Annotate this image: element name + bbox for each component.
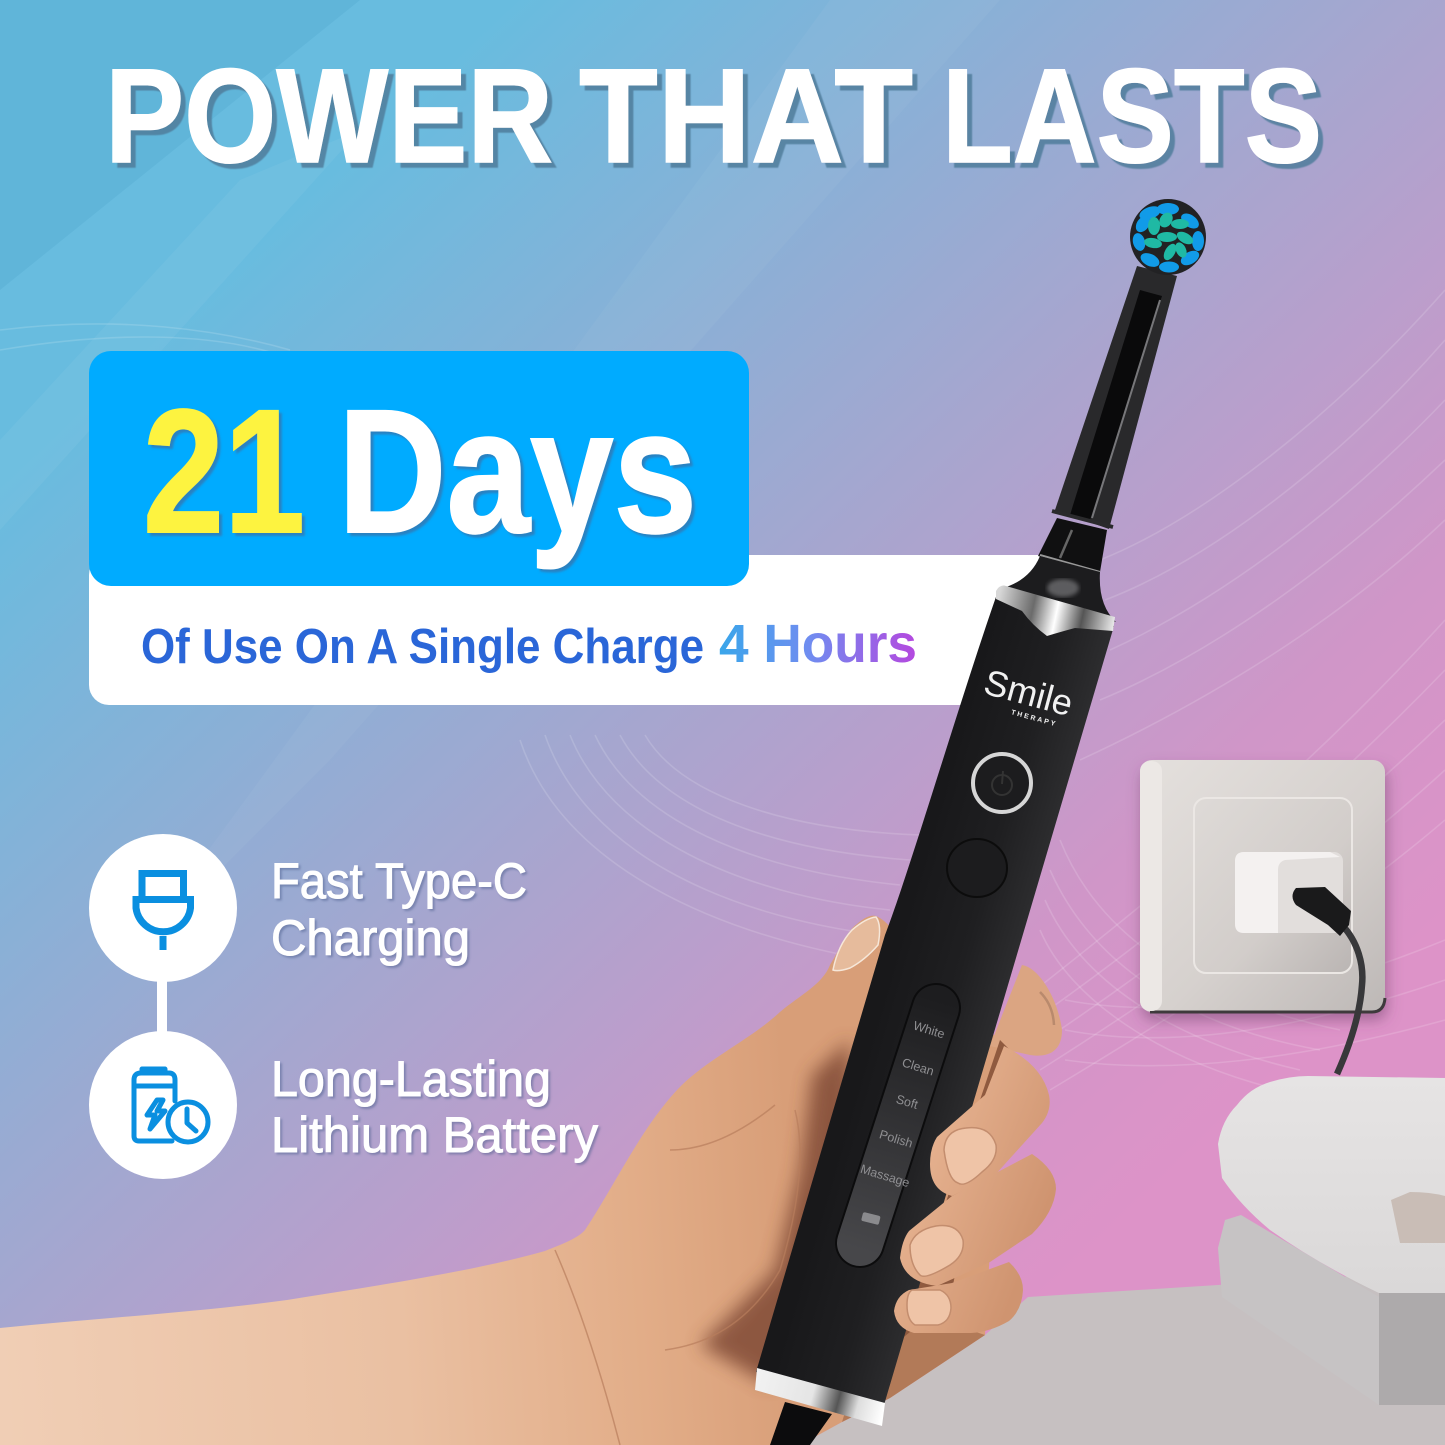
wall socket bbox=[1140, 760, 1385, 1074]
handle body bbox=[756, 594, 1114, 1405]
subtitle text: Of Use On A Single Charge bbox=[141, 620, 704, 674]
brush shaft bbox=[1055, 266, 1177, 529]
knuckle shade bbox=[900, 1040, 1015, 1340]
collar bbox=[1003, 556, 1116, 622]
feature text: fast charging: Fast Type-C bbox=[271, 853, 527, 909]
callout: blue banner bbox=[89, 351, 749, 586]
lower hand shade bbox=[842, 1300, 985, 1422]
title: THAT bbox=[579, 42, 913, 191]
mode panel bbox=[859, 1008, 946, 1243]
towels bbox=[1218, 1076, 1445, 1405]
table surface bbox=[800, 1270, 1445, 1445]
brush neck bbox=[1038, 518, 1107, 572]
charging cord bbox=[770, 1402, 832, 1445]
power button bbox=[973, 754, 1031, 812]
feature text: lithium battery: Lithium Battery bbox=[271, 1107, 598, 1163]
little finger bbox=[894, 1262, 1023, 1333]
charging cable bbox=[1337, 925, 1362, 1074]
callout: white sub-banner bbox=[89, 555, 1059, 705]
feature text: lithium battery: Long-Lasting bbox=[271, 1051, 551, 1107]
mode panel: White bbox=[912, 1019, 946, 1041]
silver collar band bbox=[996, 586, 1115, 636]
ring finger bbox=[900, 1154, 1056, 1286]
big label: Days: Days bbox=[338, 374, 697, 570]
charger bbox=[1235, 852, 1343, 933]
logo: Smile bbox=[980, 661, 1077, 724]
lower towel bbox=[1218, 1215, 1379, 1405]
hand: front fingers bbox=[894, 1046, 1056, 1333]
feature text: fast charging bbox=[271, 853, 527, 966]
charge time: 4 Hours bbox=[719, 614, 917, 674]
title: LASTS bbox=[942, 42, 1322, 191]
big number: 21: 21 bbox=[143, 374, 305, 570]
thumb nail bbox=[833, 917, 880, 971]
towel fold bbox=[1391, 1192, 1445, 1243]
connector between feature icons bbox=[157, 975, 167, 1040]
title: POWER bbox=[105, 42, 553, 191]
toothbrush bbox=[755, 199, 1206, 1445]
mode button bbox=[947, 839, 1007, 897]
feature: type-c icon bbox=[89, 834, 237, 982]
back finger bbox=[990, 965, 1062, 1056]
middle finger bbox=[930, 1046, 1050, 1196]
brush head bbox=[1130, 199, 1206, 275]
palm crease lines bbox=[555, 1105, 800, 1445]
title bbox=[105, 42, 1322, 191]
palm shadow bbox=[700, 1040, 860, 1385]
feature: battery icon bbox=[89, 1031, 237, 1179]
base ring bbox=[755, 1368, 885, 1426]
mode panel: Clean bbox=[900, 1056, 936, 1078]
upper towel bbox=[1218, 1076, 1445, 1293]
feature text: lithium battery bbox=[271, 1051, 598, 1163]
mode panel: Soft bbox=[894, 1092, 920, 1112]
hand: arm, palm and back fingers bbox=[0, 916, 1062, 1445]
feature text: fast charging: Charging bbox=[271, 910, 470, 966]
mode panel: Polish bbox=[878, 1127, 914, 1151]
logo: THERAPY bbox=[1010, 709, 1058, 728]
mode panel: Massage bbox=[859, 1162, 911, 1190]
